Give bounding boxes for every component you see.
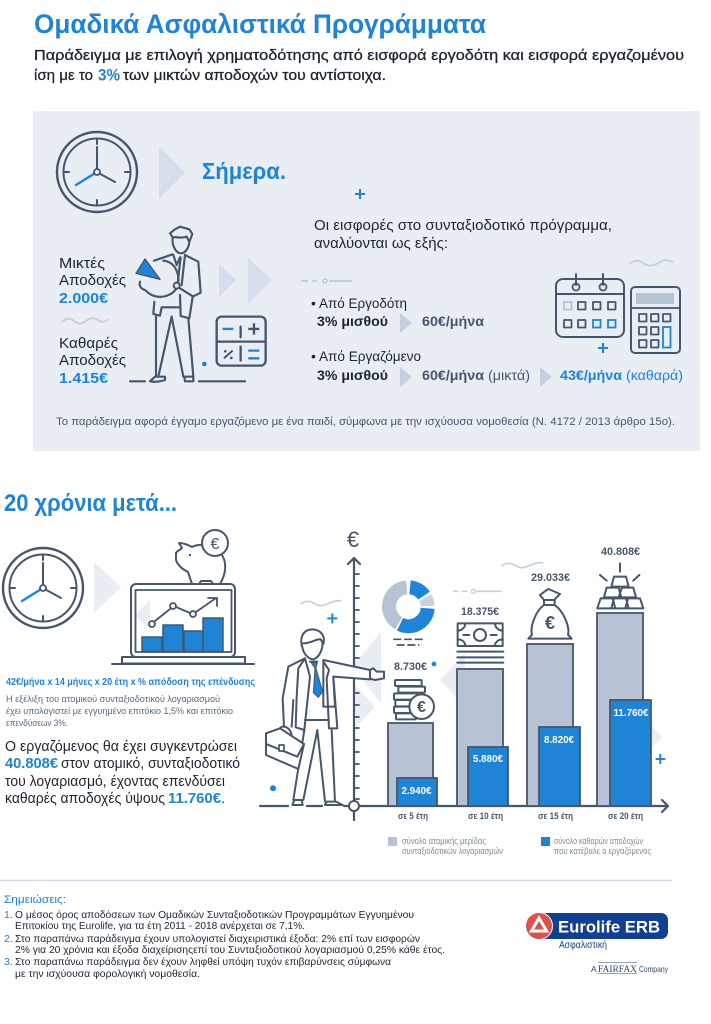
logo: Eurolife ERB: Eurolife ERB — [558, 918, 660, 936]
icon: euro glyphs — [417, 613, 555, 716]
bars: 5 years — [388, 723, 437, 806]
legend — [388, 836, 651, 857]
text: net pay: Καθαρές — [59, 336, 118, 352]
bars: 15 years — [527, 644, 580, 806]
heading: 20 years later: 20 χρόνια μετά... — [4, 490, 177, 517]
text: gross pay: Μικτές — [59, 256, 105, 272]
row: employer contribution: Από Εργοδότη — [319, 295, 407, 311]
text: net pay — [59, 336, 126, 387]
notes: με την ισχύουσα φορολογική νομοθεσία. — [15, 968, 200, 980]
notes: Επιτοκίου της Eurolife, για τα έτη 2011 - 2018 ανέρχεται σε 7,1%. — [15, 920, 305, 932]
icon: donut chart — [389, 587, 428, 645]
value labels — [394, 546, 640, 673]
row: employer contribution: 60€/μήνα — [422, 313, 484, 329]
notes: 2% για 20 χρόνια και έξοδα διαχείρισηςεπί του Συνταξιοδοτικού λογαριασμού 0,25% κάθε έτος. — [15, 944, 445, 956]
value labels: 18.375€ — [461, 606, 499, 618]
footnote: example: Το παράδειγμα αφορά έγγαμο εργαζόμενο με ένα παιδί, σύμφωνα με την ισχύουσα νομοθεσία (Ν. 4172 / 2013 άρθρο 15ο). — [56, 416, 675, 428]
logo: Eurolife ERB: Company — [639, 964, 669, 974]
icon: man holding pie chart — [130, 227, 245, 382]
axis labels: σε 15 έτη — [538, 811, 573, 822]
text: contributions intro — [314, 218, 612, 252]
row: employee contribution: • — [311, 348, 316, 364]
decoration: waves, plus signs and dots — [270, 563, 665, 791]
legend item: individual share — [388, 836, 503, 857]
decoration: wave — [629, 260, 673, 266]
bars: 5 years: 2.940€ — [402, 785, 432, 797]
subtitle text: 3% — [98, 66, 120, 84]
text: summary: Ο εργαζόμενος θα έχει συγκεντρώσει — [5, 739, 237, 755]
logo: Eurolife ERB: A — [591, 964, 597, 974]
text: contributions intro: Οι εισφορές στο συνταξιοδοτικό πρόγραμμα, — [314, 218, 612, 234]
text: contributions intro: αναλύονται ως εξής: — [314, 236, 448, 252]
icon: laptop with chart and piggy bank — [112, 530, 254, 664]
subtitle text: Παράδειγμα με επιλογή χρηματοδότησης από εισφορά εργοδότη και εισφορά εργαζομένου — [34, 47, 684, 64]
heading: today: Σήμερα. — [202, 158, 286, 184]
text: summary: 11.760€ — [168, 790, 222, 807]
axis labels: σε 10 έτη — [468, 811, 503, 822]
row: employer contribution: • — [311, 295, 316, 311]
text: calculation note: επενδύσεων 3%. — [6, 718, 68, 729]
legend item: individual share: σύνολο ατομικής μερίδας — [402, 836, 486, 847]
icon: euro glyphs: € — [545, 613, 555, 633]
row: employee contribution: Από Εργαζόμενο — [319, 348, 421, 364]
row: employee contribution — [311, 348, 683, 387]
axis labels: σε 20 έτη — [608, 811, 643, 822]
icon: businessman with briefcase — [266, 629, 384, 805]
legend item: individual share: συνταξιοδοτικών λογαριασμών — [402, 846, 503, 857]
row: employee contribution: (καθαρά) — [626, 367, 683, 383]
row: employee contribution: 3% μισθού — [317, 367, 388, 383]
arrow: today — [159, 146, 185, 199]
icon: gold bars — [597, 563, 643, 608]
title: Ομαδικά Ασφαλιστικά Προγράμματα — [34, 9, 486, 39]
bars: 20 years: 11.760€ — [614, 707, 649, 719]
notes: Σημειώσεις: — [4, 894, 66, 906]
text: calculation note: Η εξέλιξη του ατομικού συνταξιοδοτικού λογαριασμού — [6, 694, 220, 705]
text: summary — [5, 739, 240, 807]
row: employer contribution: 3% μισθού — [317, 313, 388, 329]
icon: clock later — [3, 548, 83, 628]
icon: plus — [355, 189, 365, 199]
panel: today — [33, 111, 700, 451]
wave decoration — [62, 318, 108, 324]
icon: calendar — [556, 274, 624, 337]
legend item: net earnings paid: που κατέβαλε ο εργαζόμενος — [554, 846, 651, 857]
legend item: net earnings paid — [541, 836, 651, 857]
text: summary: καθαρές αποδοχές ύψους — [5, 791, 165, 807]
subtitle text: των μικτών αποδοχών του αντίστοιχα. — [123, 67, 386, 84]
value labels: 40.808€ — [601, 546, 640, 558]
bars: 20 years — [597, 613, 651, 806]
logo: Eurolife ERB — [526, 912, 669, 975]
notes: 1. — [4, 909, 13, 921]
notes: Ο μέσος όρος αποδόσεων των Ομαδικών Συνταξιοδοτικών Προγραμμάτων Εγγυημένου — [15, 909, 414, 921]
text: summary: του λογαριασμό, έχοντας επενδύσει — [5, 774, 225, 790]
axes: € — [347, 527, 359, 552]
logo: Eurolife ERB: Ασφαλιστική — [559, 939, 607, 951]
text: calculation note — [6, 694, 233, 729]
icon: euro glyphs: € — [417, 699, 426, 716]
chart: accumulated savings bars — [260, 527, 668, 822]
row: employee contribution: 60€/μήνα — [422, 367, 484, 383]
text: gross pay: Αποδοχές — [59, 273, 126, 289]
notes: Στο παραπάνω παράδειγμα δεν έχουν ληφθεί υπόψη τυχόν επιβαρύνσεις σύμφωνα — [15, 956, 391, 968]
decoration: dashed line — [301, 279, 352, 283]
icons above the bars — [389, 563, 643, 719]
row: employee contribution: (μικτά) — [488, 367, 530, 383]
value labels: 8.730€ — [394, 661, 427, 673]
notes: Στο παραπάνω παράδειγμα έχουν υπολογιστεί διαχειριστικά έξοδα: 2% επί των εισφορών — [15, 933, 420, 945]
icon: coins — [394, 680, 434, 719]
text: net pay: Αποδοχές — [59, 353, 126, 369]
text: gross pay: 2.000€ — [59, 290, 109, 307]
text: summary: . — [221, 791, 225, 807]
text: summary: 40.808€ — [5, 755, 59, 772]
icon: banknotes — [457, 623, 503, 663]
notes: 3. — [4, 956, 13, 968]
arrow: later — [94, 562, 121, 613]
value labels: 29.033€ — [531, 572, 570, 584]
icon: calculator keypad — [217, 317, 266, 366]
text: net pay: 1.415€ — [59, 370, 109, 387]
logo: Eurolife ERB: FAIRFAX — [598, 965, 637, 975]
bars: 10 years — [457, 669, 508, 806]
notes: 2. — [4, 933, 13, 945]
row: employer contribution — [311, 295, 484, 333]
axis labels — [398, 811, 643, 822]
axes — [260, 527, 668, 820]
row: employee contribution: 43€/μήνα — [560, 367, 622, 383]
icon: clock today — [57, 132, 137, 212]
icon: money bag — [528, 589, 572, 639]
axis labels: σε 5 έτη — [398, 811, 428, 822]
bars: 15 years: 8.820€ — [544, 734, 574, 746]
text: formula: 42€/μήνα x 14 μήνες x 20 έτη x % απόδοση της επένδυσης — [6, 677, 255, 688]
text: calculation note: έχει υπολογιστεί με εγγυημένο επιτόκιο 1,5% και επιτόκιο — [6, 706, 233, 717]
bars: 10 years: 5.880€ — [473, 753, 503, 765]
legend item: net earnings paid: σύνολο καθαρών αποδοχών — [554, 836, 643, 847]
icon: plus — [598, 343, 608, 353]
text: summary: στον ατομικό, συνταξιοδοτικό — [61, 756, 240, 772]
icon: laptop with chart and piggy bank: € — [211, 536, 220, 553]
subtitle text — [34, 47, 684, 84]
arrows: double chevron — [219, 258, 272, 304]
text: gross pay — [59, 256, 126, 307]
icon: calculator — [631, 287, 680, 353]
decoration: background arrows — [352, 632, 663, 747]
subtitle text: ίση με το — [34, 67, 93, 84]
notes — [4, 894, 445, 980]
